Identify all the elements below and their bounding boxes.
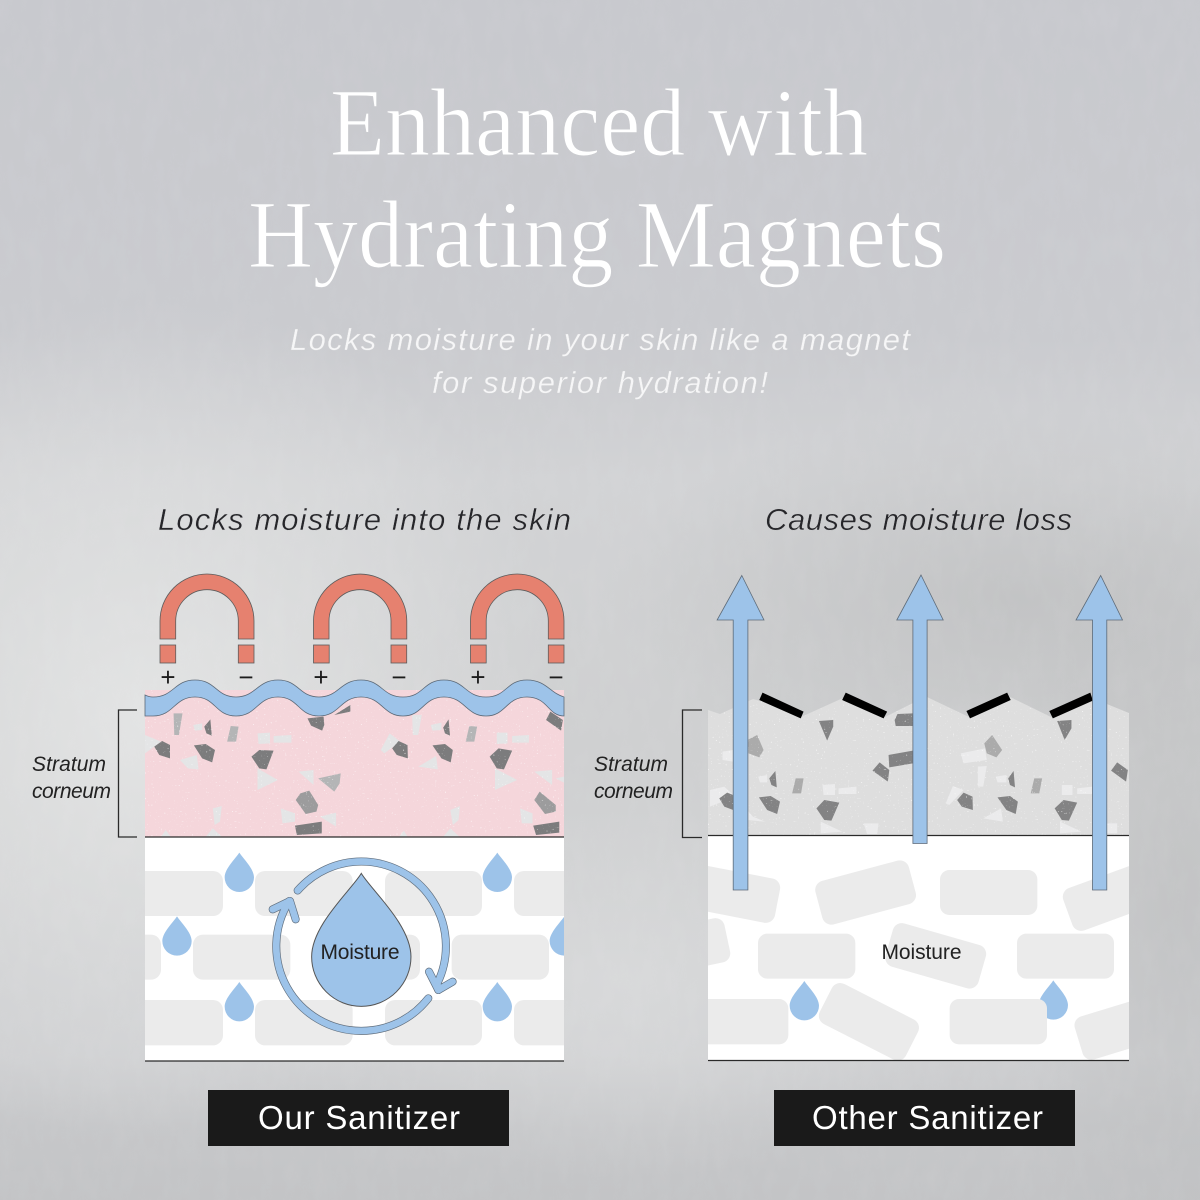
arrow 1 <box>717 576 764 890</box>
polarity signs: + <box>470 662 486 692</box>
label: other sanitizer <box>774 1090 1075 1146</box>
water barrier wave <box>145 680 564 716</box>
stratum corneum label: corneum <box>32 780 111 803</box>
stratum corneum label: Stratum <box>32 753 106 776</box>
polarity signs <box>160 662 564 692</box>
ceramide bricks and small water drops <box>63 853 612 1045</box>
arrow 3 <box>1076 576 1122 890</box>
scattered bricks and escaping water drops <box>708 860 1129 1060</box>
title: Enhanced with <box>330 69 868 176</box>
polarity signs: + <box>313 662 329 692</box>
subtitle: Locks moisture in your skin like a magnet <box>290 322 911 357</box>
white moisture layer <box>708 836 1129 1060</box>
stratum corneum label <box>594 753 673 803</box>
title <box>248 69 946 288</box>
label: other sanitizer: Other Sanitizer <box>812 1099 1043 1136</box>
magnets <box>160 574 564 663</box>
polarity signs: − <box>391 662 407 692</box>
polarity signs: + <box>160 662 176 692</box>
subtitle: for superior hydration! <box>432 365 768 400</box>
subtitle <box>290 322 911 400</box>
stratum corneum label <box>32 753 111 803</box>
moisture label: Moisture <box>320 941 400 964</box>
stratum corneum label: Stratum <box>594 753 668 776</box>
grey skin layer with terrazzo chips <box>708 690 1129 836</box>
pink skin layer with terrazzo chips <box>145 690 564 837</box>
moisture escape arrows <box>717 575 1122 890</box>
title: Hydrating Magnets <box>248 181 946 288</box>
panel: our sanitizer skin diagram <box>32 574 612 1061</box>
icon: central moisture drop <box>312 873 411 1006</box>
heading: right panel: Causes moisture loss <box>765 502 1072 537</box>
magnet 2 <box>314 574 407 663</box>
skin boundary lines <box>708 836 1129 1060</box>
arrow 2 <box>897 575 943 844</box>
polarity signs: − <box>238 662 254 692</box>
heading: left panel: Locks moisture into the skin <box>158 502 571 537</box>
stratum corneum label: corneum <box>594 780 673 803</box>
panel: other sanitizer skin diagram <box>594 575 1178 1064</box>
label: our sanitizer: Our Sanitizer <box>258 1099 460 1136</box>
polarity signs: − <box>548 662 564 692</box>
moisture lock circular arrows <box>273 861 453 1031</box>
magnet 3 <box>470 574 564 663</box>
broken barrier segments <box>759 693 1093 718</box>
label: our sanitizer <box>208 1090 509 1146</box>
magnet 1 <box>160 574 254 663</box>
stratum corneum bracket <box>118 710 137 837</box>
white moisture layer <box>145 838 564 1061</box>
stratum corneum bracket <box>682 710 702 838</box>
skin boundary lines <box>145 837 564 1061</box>
moisture label: Moisture <box>882 941 962 964</box>
